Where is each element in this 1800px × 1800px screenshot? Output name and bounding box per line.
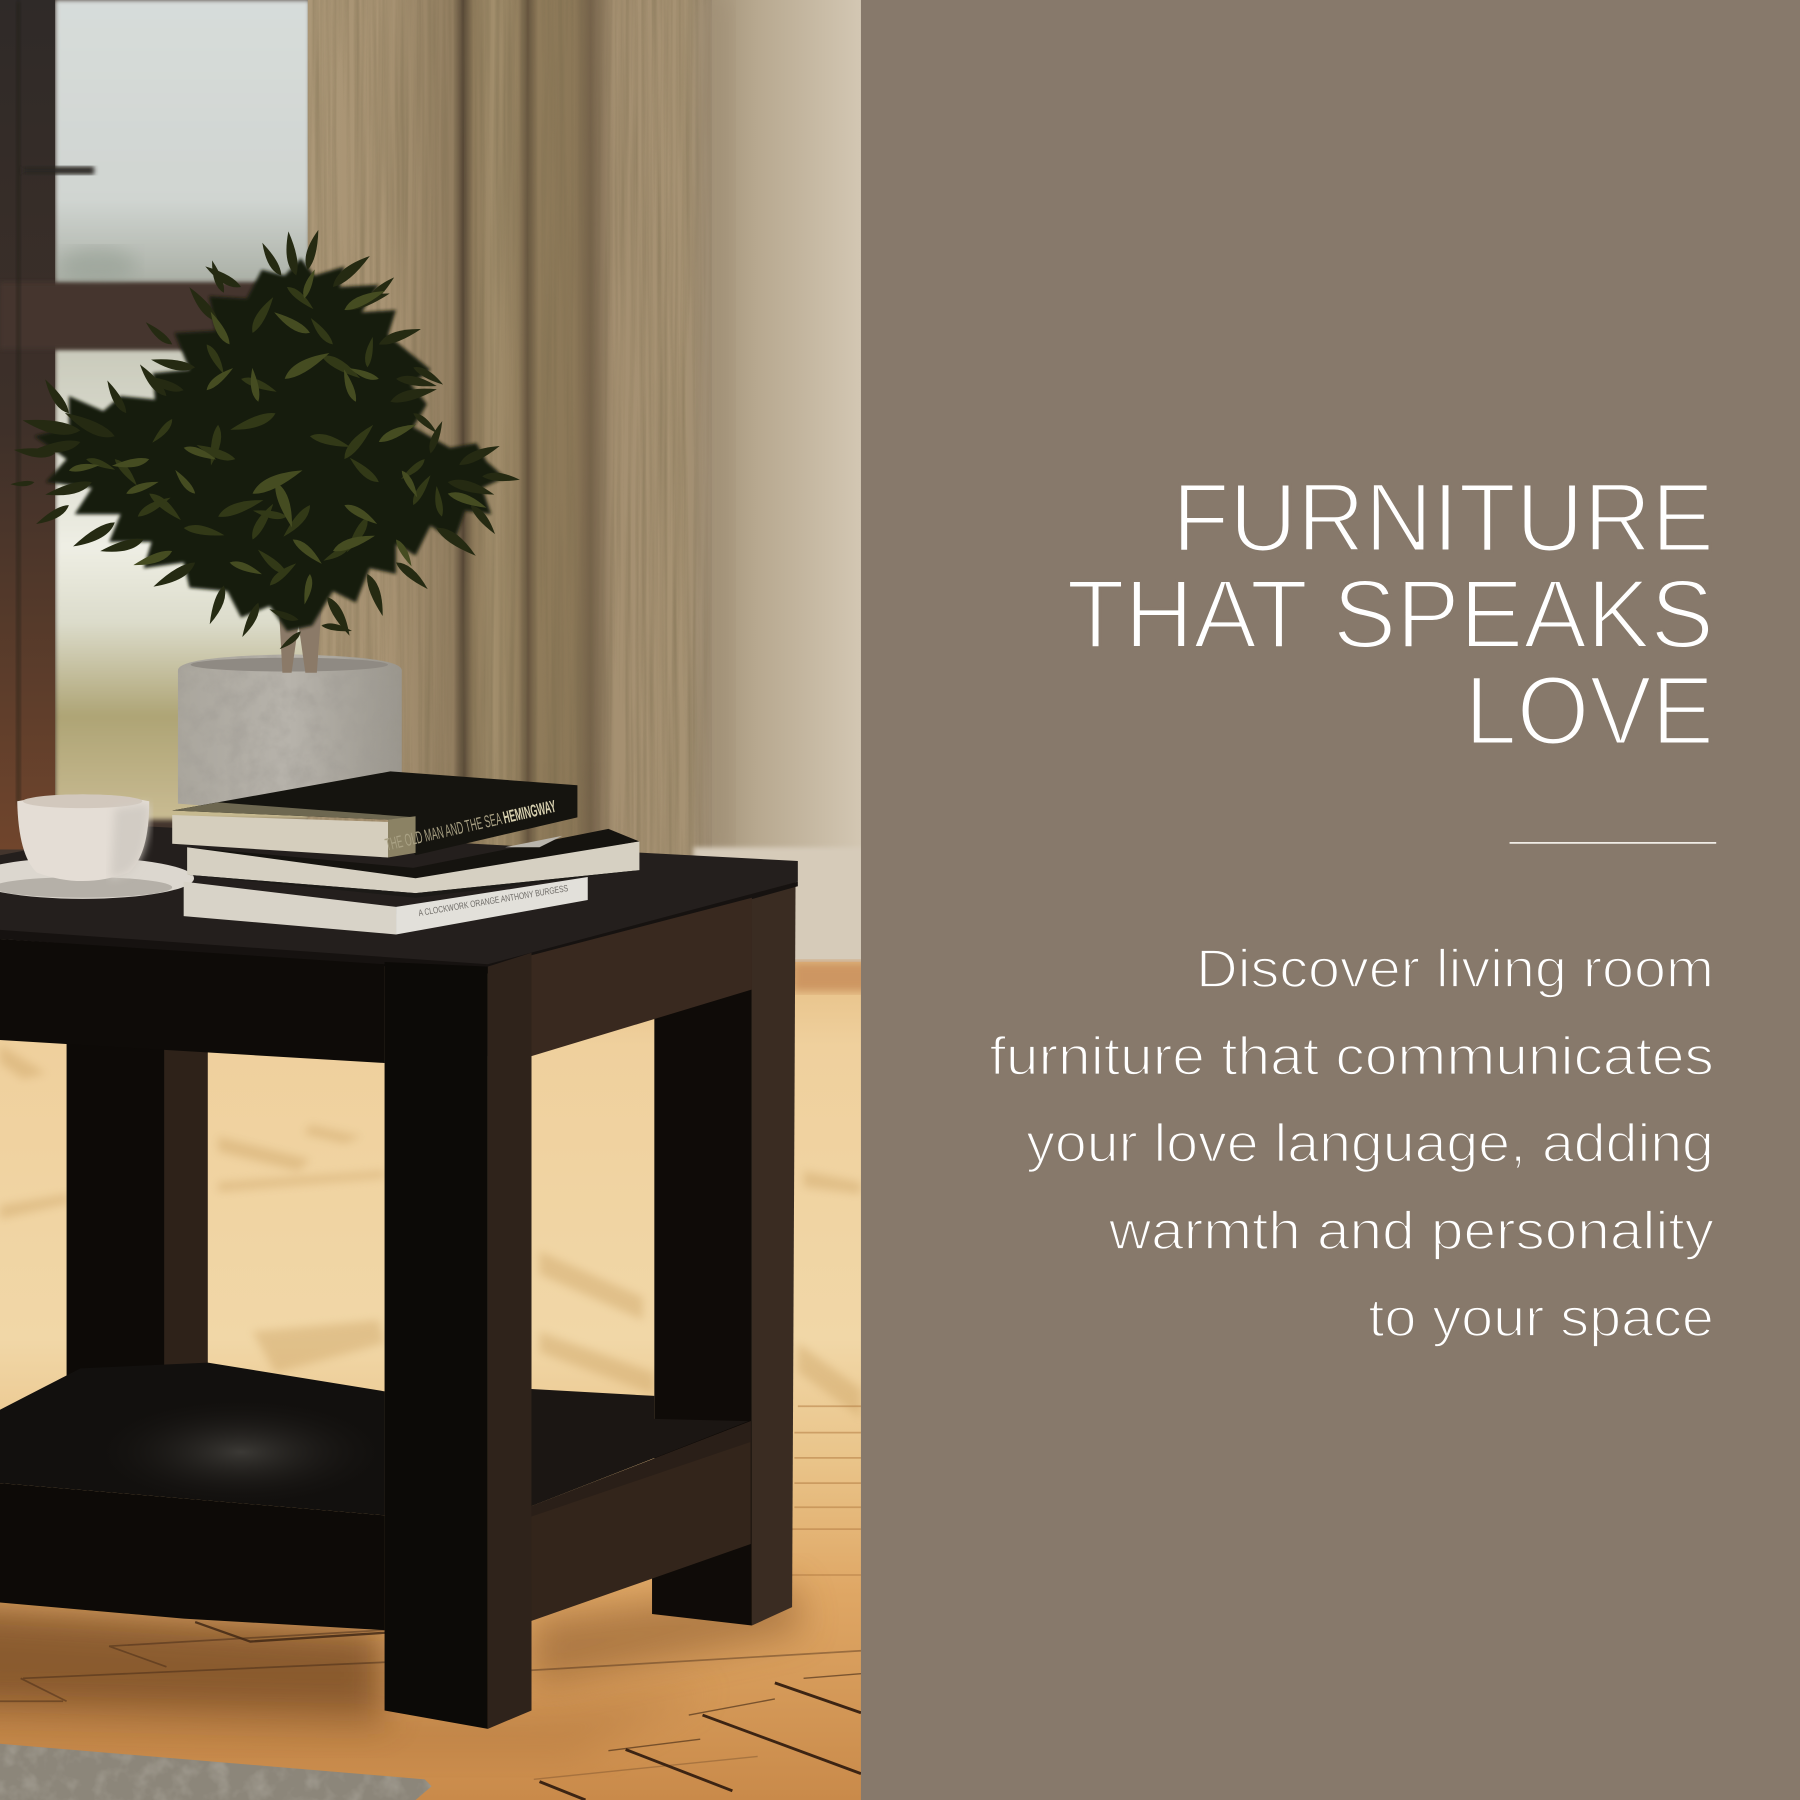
shadow under table: [0, 1603, 385, 1722]
concrete plant pot: [178, 654, 402, 806]
dark leaves: [10, 228, 520, 652]
table top: [0, 827, 798, 973]
right leg: [652, 882, 796, 1626]
book: middle: [187, 829, 639, 898]
panel: text background: [861, 0, 1800, 1800]
description text: [990, 939, 1714, 1348]
back leg: [67, 1039, 208, 1383]
title: [1066, 463, 1714, 765]
description text: warmth and personality: [1108, 1201, 1714, 1261]
side table: [0, 827, 798, 1729]
lower shelf: [0, 1363, 751, 1630]
foliage mass: [34, 258, 505, 631]
wooden floor: [0, 962, 872, 1800]
window frame and panes: [0, 0, 333, 872]
description text: your love language, adding: [1026, 1114, 1714, 1174]
book stack: [172, 771, 639, 934]
book: The Old Man and the Sea: [172, 771, 577, 858]
coffee cup and saucer: [0, 794, 194, 899]
front leg: [385, 953, 532, 1729]
upper aprons: [0, 898, 752, 1063]
description text: furniture that communicates: [990, 1026, 1714, 1086]
description text: Discover living room: [1196, 939, 1714, 999]
mid-tone leaves: [85, 283, 445, 588]
plant: [10, 228, 520, 673]
title: FURNITURE: [1172, 463, 1714, 572]
book: A Clockwork Orange: A CLOCKWORK ORANGE ANTHONY BURGESS: [418, 883, 569, 918]
highlighted leaves: [68, 268, 488, 605]
divider: [1510, 842, 1716, 844]
book: The Old Man and the Sea: THE OLD MAN AND THE SEA HEMINGWAY: [383, 796, 558, 855]
rug: [0, 1739, 436, 1800]
title: LOVE: [1465, 656, 1714, 765]
title: THAT SPEAKS: [1066, 559, 1714, 668]
panel: room photograph: [0, 0, 877, 1800]
curtain: [308, 0, 712, 855]
wall and baseboard: [693, 0, 877, 967]
description text: to your space: [1368, 1288, 1714, 1348]
stem: [279, 608, 321, 673]
book: A Clockwork Orange: [184, 877, 588, 934]
